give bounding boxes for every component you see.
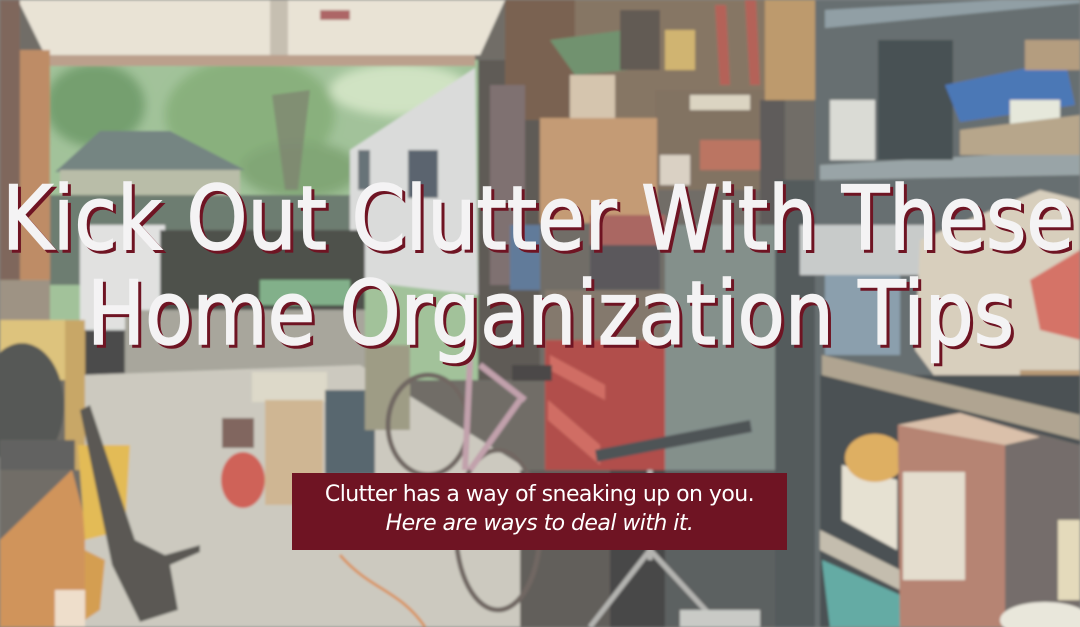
items mid shelf (800, 225, 930, 275)
shelving right (815, 0, 1080, 627)
cord (340, 555, 425, 627)
left wall (0, 0, 20, 300)
tripod (595, 420, 752, 462)
compressor (222, 418, 254, 448)
RV (350, 68, 478, 295)
glass door (665, 225, 775, 470)
cabinet (540, 118, 657, 223)
outdoors (45, 60, 485, 380)
boxes on floor (252, 372, 327, 402)
bike (520, 470, 610, 627)
callout banner: Clutter has a way of sneaking up on you. (325, 482, 754, 507)
cardboard box (898, 413, 1080, 627)
garage door (18, 0, 505, 55)
title shadow (5, 170, 1077, 368)
center column (478, 60, 540, 380)
callout banner: Here are ways to deal with it. (386, 511, 693, 536)
title text (2, 167, 1074, 365)
red tool chest (590, 215, 665, 250)
callout banner (292, 473, 787, 550)
pegboard (765, 0, 815, 100)
vehicle / truck (80, 225, 165, 345)
floor (85, 365, 545, 627)
tools above cabinet (575, 0, 775, 120)
lower shelf (820, 375, 1080, 627)
